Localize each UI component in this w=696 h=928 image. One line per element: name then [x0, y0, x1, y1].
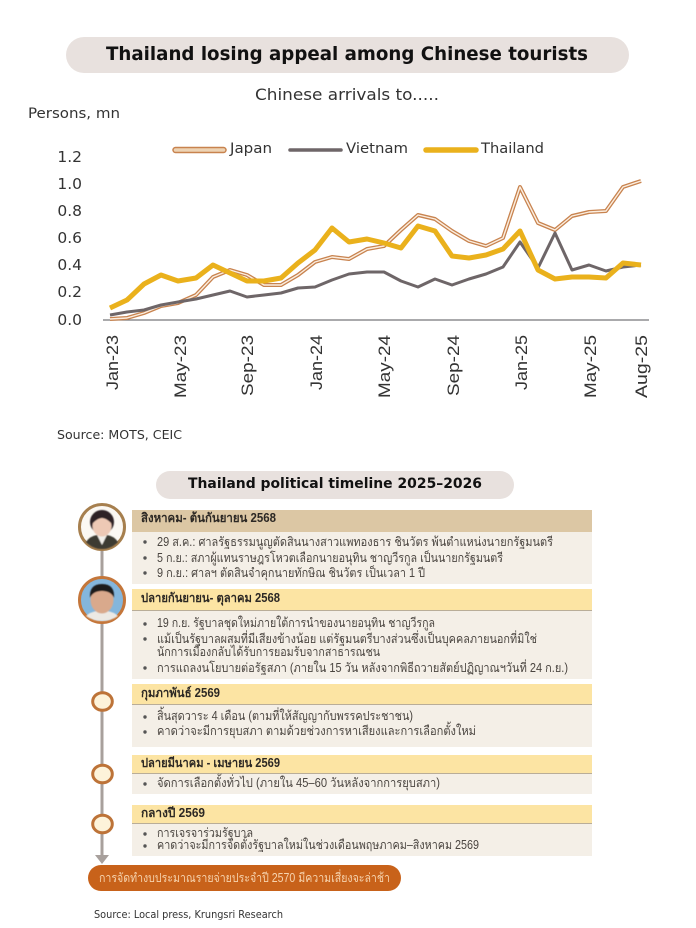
- series: Thailand: [110, 226, 641, 308]
- legend: [173, 141, 544, 157]
- x axis: [103, 319, 649, 321]
- x axis labels: May-24: [375, 335, 394, 398]
- chart source: Source: MOTS, CEIC: [57, 428, 182, 442]
- line chart: Chinese arrivals: [57, 141, 651, 398]
- callout: budget delay risk: [88, 865, 401, 891]
- icon: March-April marker: [93, 765, 112, 783]
- y axis labels: 0.8: [57, 202, 82, 220]
- icon: mid-year marker: [93, 815, 112, 833]
- panel: August to early September 2568: [132, 510, 592, 584]
- chart subtitle: Chinese arrivals to.....: [255, 85, 439, 104]
- panel: late September to October 2568: 19 ก.ย. รัฐบาลชุดใหม่ภายใต้การนำของนายอนุทิน ชาญวีรกูล: [157, 616, 435, 631]
- title: Thailand losing appeal among Chinese tourists: [106, 43, 588, 65]
- panel: mid 2569: คาดว่าจะมีการจัดตั้งรัฐบาลใหม่ในช่วงเดือนพฤษภาคม–สิงหาคม 2569: [157, 835, 479, 852]
- series: Vietnam: [110, 233, 641, 315]
- timeline source: Source: Local press, Krungsri Research: [94, 909, 283, 921]
- y axis labels: 0.0: [57, 311, 82, 329]
- panel: August to early September 2568: 5 ก.ย.: สภาผู้แทนราษฎรโหวตเลือกนายอนุทิน ชาญวีรกูล เป็นนายกรัฐมนตรี: [157, 550, 503, 566]
- y axis labels: 1.0: [57, 175, 82, 193]
- panel: late September to October 2568: นักการเมืองกลับได้รับการยอมรับจากสาธารณชน: [157, 645, 380, 659]
- callout: budget delay risk: การจัดทำงบประมาณรายจ่ายประจำปี 2570 มีความเสี่ยงจะล่าช้า: [99, 869, 390, 885]
- series: Japan: [110, 181, 641, 319]
- panel: mid 2569: กลางปี 2569: [141, 806, 205, 820]
- panel: late September to October 2568: ปลายกันยายน- ตุลาคม 2568: [141, 591, 280, 606]
- legend: Vietnam: [346, 141, 408, 157]
- icon: portrait of Paetongtarn: [80, 504, 124, 550]
- panel: August to early September 2568: 29 ส.ค.: ศาลรัฐธรรมนูญตัดสินนางสาวแพทองธาร ชินวัตร พ้นตำแหน่งนายกรัฐมนตรี: [157, 535, 553, 550]
- title: [66, 37, 629, 73]
- legend: Japan: [229, 141, 272, 157]
- panel: February 2569: [132, 684, 592, 747]
- x axis labels: Aug-25: [632, 335, 651, 398]
- panel: late March to April 2569: จัดการเลือกตั้งทั่วไป (ภายใน 45–60 วันหลังจากการยุบสภา): [157, 773, 440, 791]
- panel: late September to October 2568: แม้เป็นรัฐบาลผสมที่มีเสียงข้างน้อย แต่รัฐมนตรีบางส่วนซึ่งเป็นบุคคลภายนอกที่มิใช่: [157, 630, 537, 647]
- y axis labels: [57, 148, 82, 329]
- x axis labels: Jan-25: [512, 335, 531, 390]
- y-axis unit label: Persons, mn: [28, 106, 120, 122]
- icon: February marker: [93, 693, 112, 710]
- panel: mid 2569: [132, 805, 592, 856]
- panel: February 2569: สิ้นสุดวาระ 4 เดือน (ตามที่ให้สัญญากับพรรคประชาชน): [157, 706, 413, 724]
- panel: February 2569: กุมภาพันธ์ 2569: [141, 685, 220, 701]
- panel: August to early September 2568: 9 ก.ย.: ศาลฯ ตัดสินจำคุกนายทักษิณ ชินวัตร เป็นเวลา 1 ปี: [157, 565, 425, 581]
- panel: mid 2569: การเจรจาร่วมรัฐบาล: [157, 826, 253, 840]
- panel: August to early September 2568: สิงหาคม- ต้นกันยายน 2568: [141, 511, 276, 525]
- panel: February 2569: คาดว่าจะมีการยุบสภา ตามด้วยช่วงการหาเสียงและการเลือกตั้งใหม่: [157, 721, 476, 739]
- x axis labels: Sep-24: [444, 335, 463, 396]
- icon: portrait of Anutin: [80, 578, 124, 622]
- timeline heading: Thailand political timeline 2025–2026: [188, 476, 482, 492]
- y axis labels: 0.6: [57, 229, 82, 247]
- x axis labels: [103, 335, 651, 398]
- timeline heading: [156, 471, 514, 499]
- y axis labels: 0.2: [57, 283, 82, 301]
- y axis labels: 0.4: [57, 256, 82, 274]
- timeline spine with arrow: [95, 540, 109, 864]
- x axis labels: May-25: [581, 335, 600, 398]
- y axis labels: 1.2: [57, 148, 82, 166]
- legend: Thailand: [480, 141, 544, 157]
- x axis labels: Jan-23: [103, 335, 122, 390]
- panel: late March to April 2569: ปลายมีนาคม - เมษายน 2569: [141, 756, 280, 770]
- panel: late September to October 2568: การแถลงนโยบายต่อรัฐสภา (ภายใน 15 วัน หลังจากพิธีถวายสัตย์ปฏิญาณฯวันที่ 24 ก.ย.): [157, 659, 568, 675]
- x axis labels: Sep-23: [238, 335, 257, 396]
- panel: late September to October 2568: [132, 589, 592, 679]
- x axis labels: Jan-24: [307, 335, 326, 390]
- panel: late March to April 2569: [132, 755, 592, 794]
- x axis labels: May-23: [171, 335, 190, 398]
